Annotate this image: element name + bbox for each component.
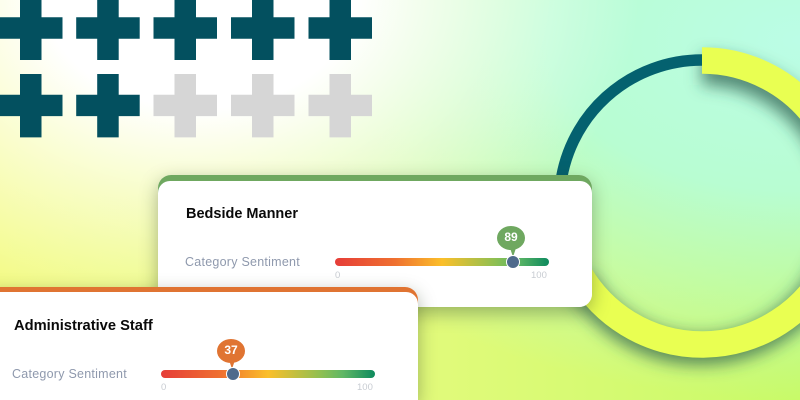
card body xyxy=(158,181,592,307)
scale minimum: 0 xyxy=(335,270,340,281)
card heading: Administrative Staff xyxy=(14,318,153,334)
scale maximum: 100 xyxy=(531,270,547,281)
slider thumb xyxy=(506,254,520,268)
plus icon row one xyxy=(0,0,372,60)
card: Administrative Staff xyxy=(0,287,418,400)
slider thumb xyxy=(226,366,240,380)
category label: Category Sentiment xyxy=(185,255,300,269)
score bubble: 89 xyxy=(504,230,518,244)
card body xyxy=(0,292,418,400)
card: Bedside Manner xyxy=(158,175,592,307)
sentiment slider xyxy=(335,258,549,266)
card heading: Bedside Manner xyxy=(186,206,298,222)
sentiment slider xyxy=(161,370,375,378)
card accent strip orange xyxy=(0,287,418,307)
ring shadow xyxy=(580,70,800,350)
score pointer xyxy=(510,248,516,257)
score bubble: 37 xyxy=(224,343,238,357)
plus icon row two filled xyxy=(0,74,140,137)
card accent strip green xyxy=(158,175,592,195)
ring teal segment xyxy=(560,60,703,190)
category label: Category Sentiment xyxy=(12,367,127,381)
scale minimum: 0 xyxy=(161,382,166,393)
score bubble xyxy=(217,339,245,363)
scale maximum: 100 xyxy=(357,382,373,393)
score pointer xyxy=(229,360,235,369)
ring yellow segment xyxy=(580,60,800,344)
plus icon row two empty xyxy=(154,74,372,137)
score bubble xyxy=(497,226,525,250)
plus icon rating grid xyxy=(0,0,372,138)
